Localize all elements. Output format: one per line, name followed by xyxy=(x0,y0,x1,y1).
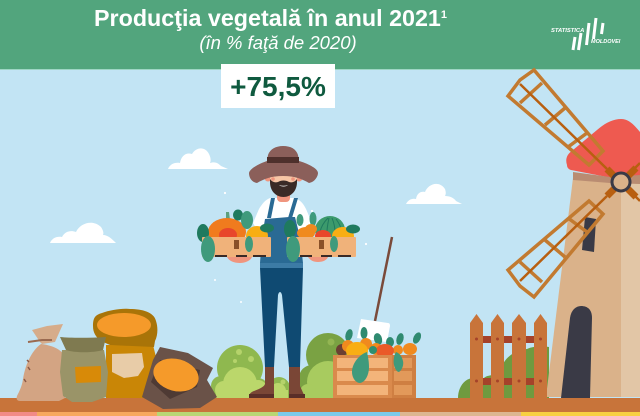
callout: +75,5% xyxy=(221,64,335,108)
subtitle: (în % faţă de 2020) xyxy=(199,32,357,53)
right sails xyxy=(621,163,640,201)
upper-left sail xyxy=(508,70,615,177)
legs and overalls xyxy=(260,198,303,367)
callout: +75,5%: +75,5% xyxy=(230,71,326,102)
leaves xyxy=(286,236,300,262)
hat xyxy=(249,146,318,183)
logo: Statistica Moldovei xyxy=(551,18,621,50)
header band xyxy=(0,0,640,70)
windmill xyxy=(508,70,640,398)
leaves xyxy=(352,352,369,383)
box xyxy=(202,237,271,257)
tower xyxy=(546,178,640,397)
bush behind fence xyxy=(458,346,549,398)
clouds xyxy=(50,148,462,243)
produce xyxy=(197,210,274,246)
logo: Statistica Moldovei: MOLDOVEI xyxy=(591,39,621,45)
sack: olive xyxy=(60,337,108,402)
ground xyxy=(0,398,640,412)
bushes: right xyxy=(299,333,351,403)
sparkle stars xyxy=(214,192,367,303)
title: Producţia vegetală în anul 2021 xyxy=(94,5,441,31)
grain sacks xyxy=(17,309,217,409)
lower-left sail xyxy=(508,188,615,297)
sack: open dark xyxy=(142,347,217,409)
vegetables xyxy=(336,327,423,360)
shirt xyxy=(253,198,312,237)
hands xyxy=(227,257,328,263)
logo: Statistica Moldovei: STATISTICA xyxy=(551,28,584,34)
sails xyxy=(508,70,640,297)
shovel xyxy=(357,237,392,342)
door xyxy=(561,306,592,398)
crate held: right xyxy=(284,212,360,262)
box xyxy=(287,237,356,257)
leaves xyxy=(201,236,215,262)
vegetable crate on ground xyxy=(333,327,423,398)
boots xyxy=(249,367,305,397)
neck xyxy=(277,191,290,202)
fence xyxy=(470,314,547,398)
roof xyxy=(566,119,640,184)
hub xyxy=(612,173,630,191)
head xyxy=(264,165,302,197)
sack: round orange xyxy=(93,309,158,398)
sack: tied brown xyxy=(17,324,65,401)
produce xyxy=(284,212,360,245)
crate held: left xyxy=(197,210,274,262)
title: 1 xyxy=(441,9,447,21)
colour strip xyxy=(0,412,640,416)
bushes: left xyxy=(211,345,290,401)
farmer xyxy=(227,146,328,398)
window xyxy=(582,217,596,252)
crate body xyxy=(333,355,392,398)
